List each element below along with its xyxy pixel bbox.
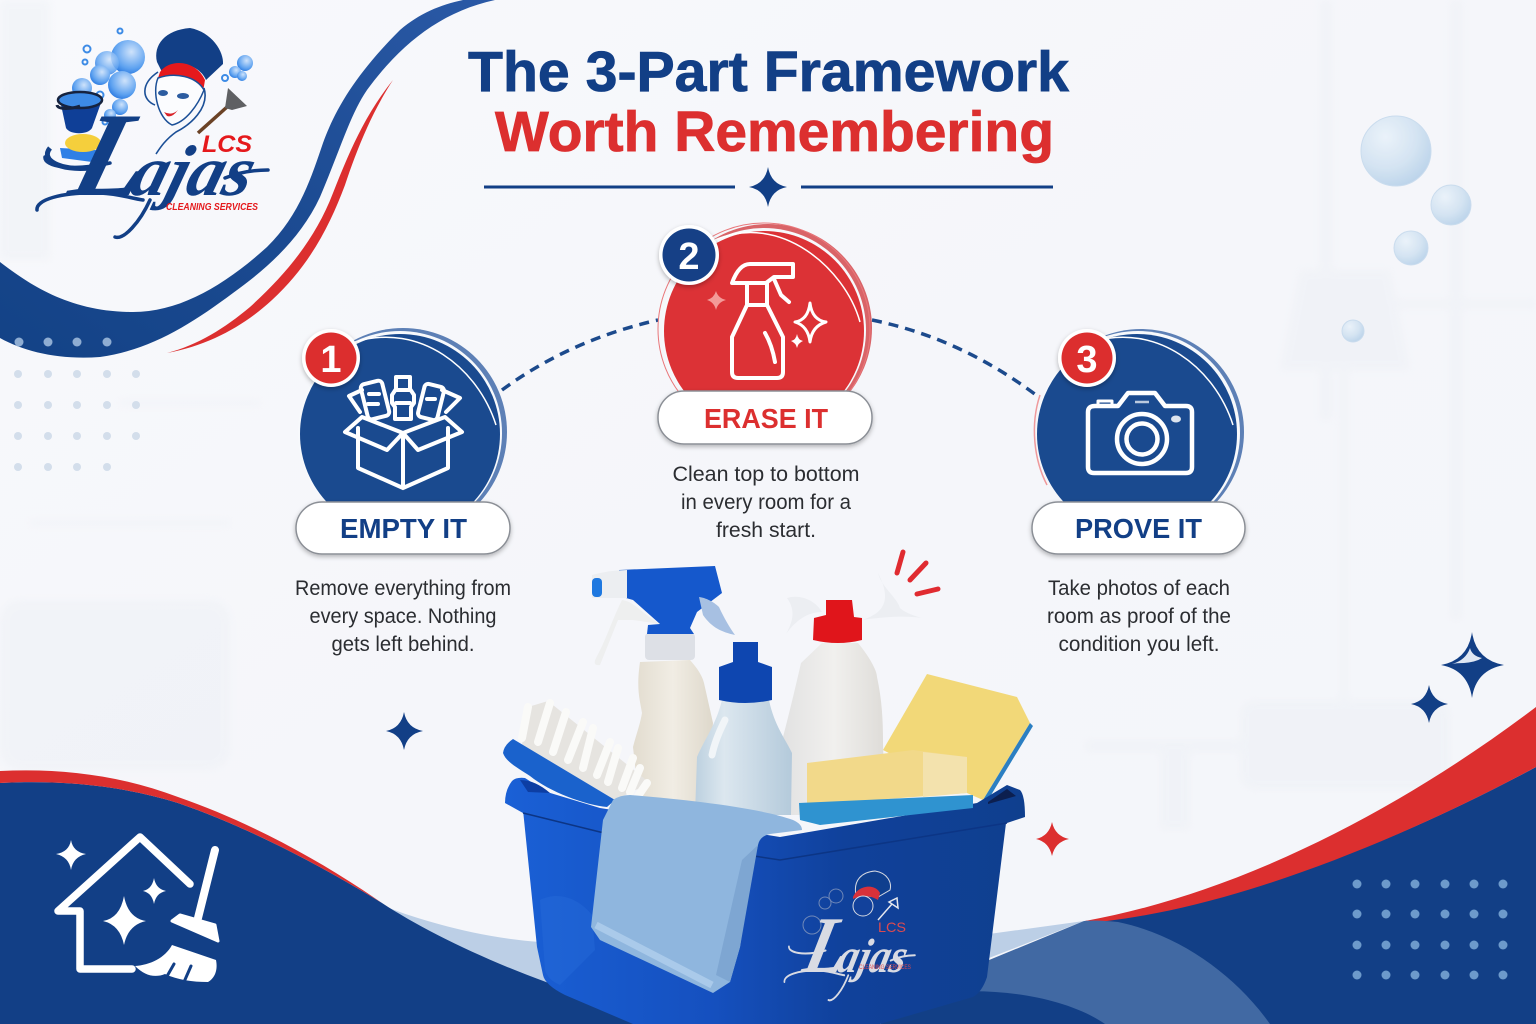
brush — [503, 701, 650, 807]
tub logo: LCS — [878, 919, 906, 935]
step 1: empty it — [295, 328, 511, 656]
soap bubbles — [1342, 116, 1471, 342]
badge 2 — [659, 225, 719, 285]
tub logo — [784, 871, 920, 1000]
icon: spray bottle with sparkles — [707, 264, 826, 378]
title — [468, 40, 1069, 164]
badge 1: 1 — [320, 339, 342, 381]
photo: cleaning caddy with supplies — [503, 552, 1033, 1024]
tub body — [505, 778, 1025, 1024]
dot grid right — [1352, 880, 1508, 980]
sparkle star left — [386, 712, 423, 750]
logo wordmark: Lajas — [57, 89, 278, 221]
back sponge — [883, 674, 1033, 800]
description 1: every space. Nothing — [310, 605, 496, 628]
step 3 disc — [1034, 329, 1244, 535]
pill: empty it — [296, 502, 510, 554]
step 3: prove it — [1032, 329, 1245, 656]
pale blue bottle — [695, 642, 792, 815]
description 2: in every room for a — [681, 491, 851, 514]
pill: prove it — [1032, 502, 1245, 554]
description 1: gets left behind. — [332, 633, 474, 656]
title: Worth Remembering — [495, 100, 1054, 164]
step 1 disc — [298, 328, 507, 536]
pill: erase it — [658, 391, 872, 444]
spray bottle — [592, 566, 735, 810]
sparkle stars right — [1411, 632, 1504, 723]
badge 1 — [302, 329, 360, 387]
bottom-right wave — [880, 707, 1536, 1024]
icon: open box with items — [345, 377, 462, 488]
tub logo: CLEANING SERVICES — [859, 964, 912, 971]
step 2 disc — [658, 223, 872, 435]
badge 3 — [1058, 329, 1116, 387]
description 3: room as proof of the — [1047, 605, 1231, 628]
description 3: condition you left. — [1058, 633, 1220, 656]
bottom-left wave — [0, 770, 660, 1024]
sparkle star red — [1036, 822, 1069, 856]
icon: house with broom — [56, 837, 218, 982]
badge 3: 3 — [1076, 339, 1098, 381]
logo: Lajas Cleaning Services: LCS — [202, 131, 252, 158]
tub logo: Lajas — [796, 902, 920, 990]
white bottle with red cap — [783, 600, 885, 815]
description 2: Clean top to bottom — [672, 463, 860, 486]
dashed connector 1 to 2 — [502, 320, 658, 390]
top-left swoosh — [0, 0, 495, 358]
dot grid left — [14, 338, 140, 471]
step 2: erase it — [658, 223, 872, 542]
towel — [591, 795, 802, 993]
description 3: Take photos of each — [1048, 577, 1230, 600]
description 1: Remove everything from — [295, 577, 511, 600]
description 1 — [295, 577, 511, 656]
dashed connector 2 to 3 — [872, 320, 1036, 395]
description 3 — [1047, 577, 1231, 656]
description 2 — [672, 463, 860, 542]
pill: empty it: EMPTY IT — [340, 513, 467, 544]
pill: erase it: ERASE IT — [704, 403, 828, 434]
front sponge — [799, 750, 973, 825]
logo: Lajas Cleaning Services: CLEANING SERVICES — [166, 202, 258, 213]
title divider — [484, 167, 1053, 207]
red burst and spray mist — [786, 552, 938, 634]
icon: camera — [1088, 393, 1192, 473]
title: The 3-Part Framework — [468, 40, 1069, 104]
logo: Lajas Cleaning Services — [37, 28, 278, 237]
badge 2: 2 — [678, 236, 700, 278]
pill: prove it: PROVE IT — [1075, 513, 1202, 544]
description 2: fresh start. — [716, 519, 816, 542]
